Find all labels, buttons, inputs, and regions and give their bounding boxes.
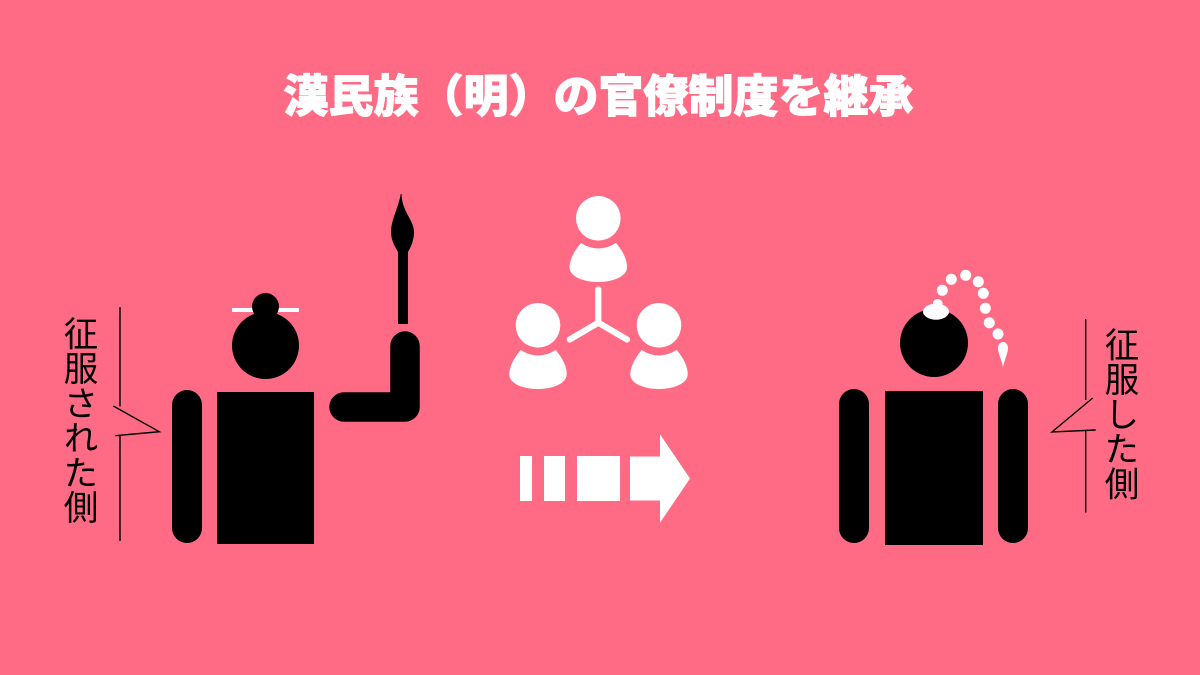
callout: conquered side bracket bbox=[113, 307, 159, 541]
person lower left bbox=[509, 303, 567, 389]
person lower right bbox=[630, 303, 688, 389]
icon: writing brush bbox=[391, 194, 414, 324]
label: conquered side: 征服された側 bbox=[58, 316, 96, 524]
figure: conquered side person with brush bbox=[172, 194, 414, 544]
title: 漢民族（明）の官僚制度を継承 bbox=[283, 71, 914, 122]
raised right arm bbox=[344, 346, 405, 407]
icon: three people hierarchy bbox=[509, 196, 688, 389]
hair bun bbox=[252, 293, 279, 320]
label: conquering side: 征服した側 bbox=[1099, 327, 1137, 500]
body bbox=[885, 391, 983, 545]
queue hair root bbox=[923, 299, 949, 320]
left arm bbox=[839, 389, 869, 543]
right arm bbox=[998, 389, 1028, 543]
figure: conquering side person with queue bbox=[839, 270, 1028, 545]
head bbox=[232, 312, 299, 379]
callout: conquering side bracket bbox=[1052, 319, 1096, 512]
person top bbox=[570, 196, 627, 282]
body bbox=[217, 392, 314, 544]
arrow: progress to the right bbox=[520, 434, 690, 523]
head bbox=[900, 309, 968, 377]
hairpin bbox=[232, 308, 299, 312]
queue braid bbox=[937, 270, 1008, 367]
connector bbox=[570, 290, 627, 340]
left arm bbox=[172, 390, 202, 543]
